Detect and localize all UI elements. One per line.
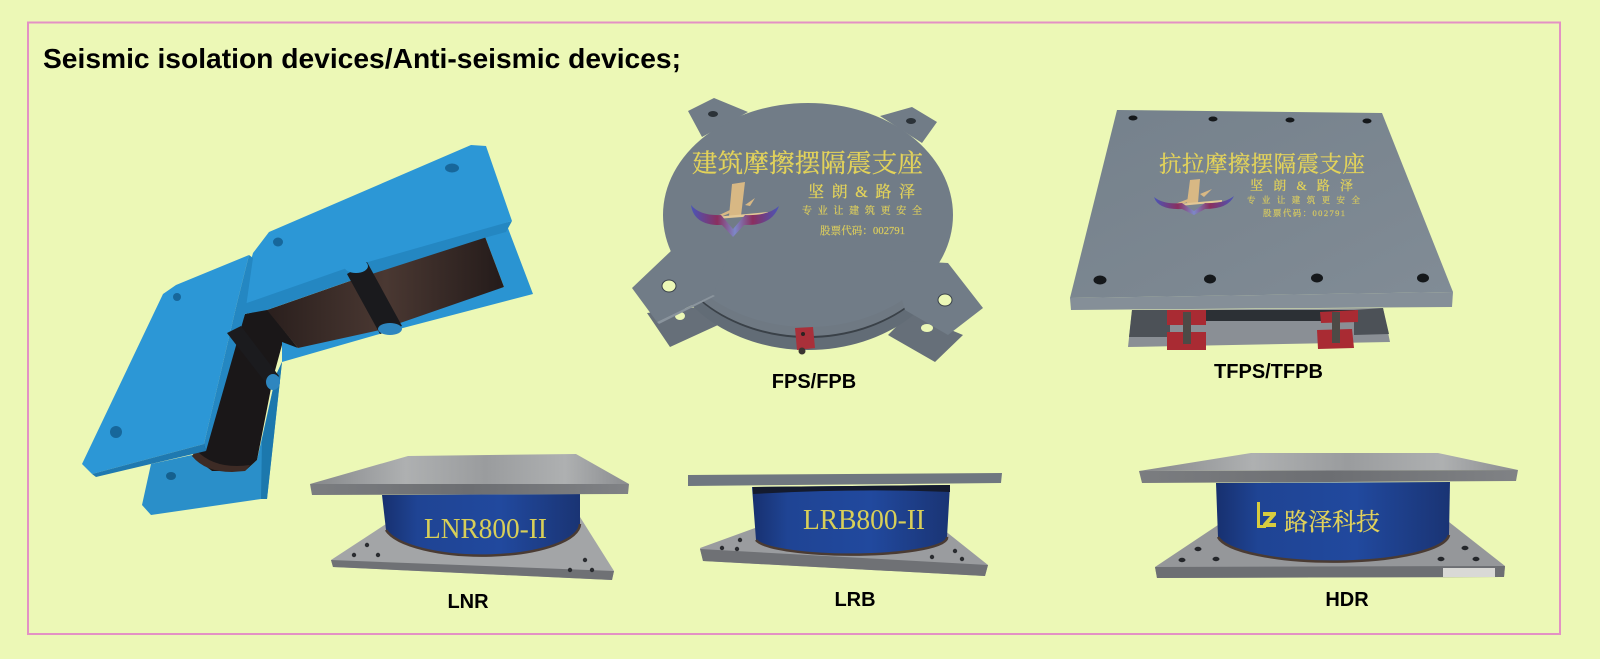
top plate	[688, 473, 1002, 486]
logo	[691, 182, 779, 237]
holes	[708, 111, 718, 117]
device: LRB	[688, 473, 1002, 576]
seam	[701, 300, 905, 338]
device: TFPS/TFPB: 坚 朗 & 路 泽	[1250, 178, 1353, 193]
rubber marking	[1257, 502, 1380, 536]
plate text: 抗拉摩擦摆隔震支座	[1159, 152, 1365, 177]
label: LRB: LRB	[834, 589, 876, 611]
left plate top face	[82, 255, 249, 474]
left rubber	[192, 309, 298, 471]
rubber marking: 路泽科技	[1284, 509, 1380, 536]
lower plate	[331, 517, 614, 580]
lower left plate	[142, 362, 282, 515]
device: TFPS/TFPB: 股票代码：002791	[1263, 208, 1345, 218]
lower plate	[700, 528, 988, 576]
top plate with tabs	[632, 98, 983, 335]
upper cylinder post	[347, 262, 402, 334]
plate text: 建筑摩擦摆隔震支座	[692, 149, 923, 178]
lower brackets	[647, 307, 718, 347]
left cylinder post	[227, 326, 279, 387]
plate underside edge	[239, 221, 512, 314]
bottom holes	[1178, 546, 1480, 562]
rubber marking: LRB800-II	[803, 504, 925, 536]
label: HDR: HDR	[1325, 589, 1369, 611]
device: LNR	[310, 454, 629, 580]
device: FPS/FPB: 股票代码：002791	[820, 224, 905, 237]
upper rubber	[267, 234, 504, 348]
red clip	[795, 327, 815, 350]
bottom holes	[352, 543, 594, 572]
device: FPS/FPB: 坚 朗 & 路 泽	[808, 183, 915, 201]
upper lower-rim	[282, 223, 533, 362]
rubber core	[382, 494, 580, 556]
device: TFPS/TFPB	[1070, 110, 1453, 350]
rubber marking: LNR800-II	[424, 513, 547, 545]
title: Seismic isolation devices/Anti-seismic devices;	[43, 43, 681, 74]
label: TFPS/TFPB: TFPS/TFPB	[1214, 361, 1323, 383]
lower plate	[1155, 522, 1505, 578]
label: LNR: LNR	[447, 591, 489, 613]
top plate	[1139, 453, 1518, 471]
upper plate top face	[239, 145, 512, 305]
logo	[1154, 179, 1234, 215]
device: blue folded damper	[82, 145, 533, 515]
device: HDR	[1139, 453, 1518, 578]
bottom holes	[720, 538, 964, 561]
sticker	[1443, 568, 1495, 577]
device: TFPS/TFPB: 专业让建筑更安全	[1247, 195, 1360, 205]
rubber core	[752, 485, 950, 555]
holes	[1094, 116, 1429, 284]
top plate	[310, 454, 629, 484]
device: FPS/FPB	[632, 98, 983, 362]
label: FPS/FPB: FPS/FPB	[772, 371, 856, 393]
lower plate	[1128, 308, 1390, 347]
red bolted brackets	[1167, 310, 1358, 350]
rubber core	[1216, 482, 1450, 562]
top face	[1070, 110, 1453, 298]
body side	[692, 301, 912, 350]
front edge	[1070, 292, 1453, 310]
device: FPS/FPB: 专业让建筑更安全	[802, 204, 922, 217]
